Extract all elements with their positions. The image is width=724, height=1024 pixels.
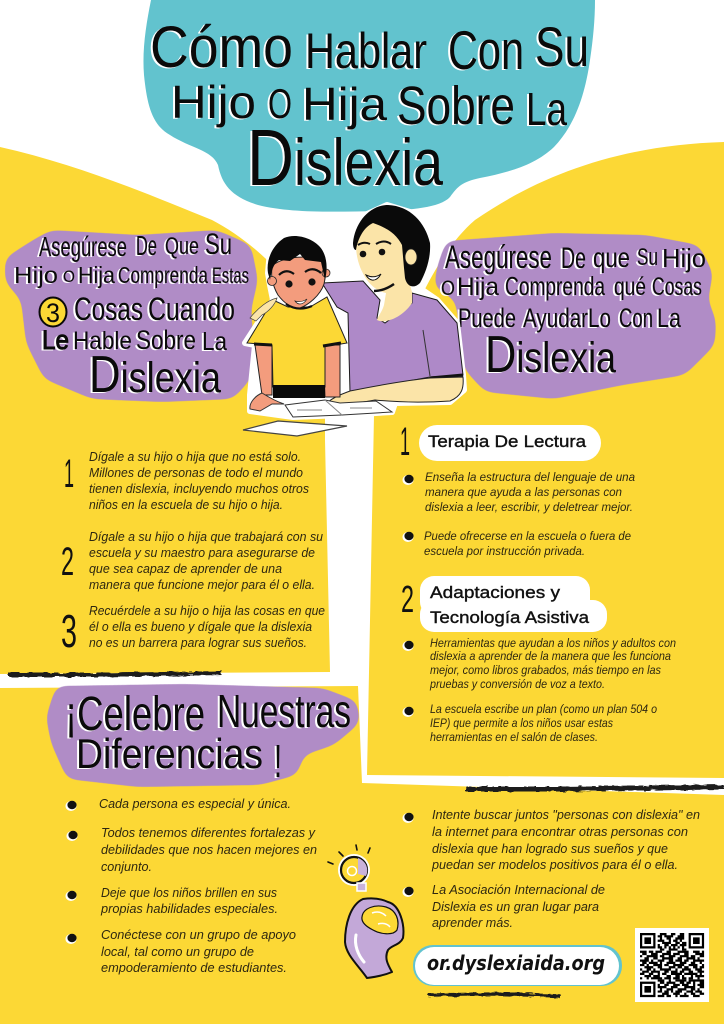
boy: arms (255, 345, 272, 395)
panel: right purple heading: Cosas (652, 273, 702, 301)
bullet text (424, 530, 632, 558)
bullet text: Cada persona es especial y única. (99, 796, 291, 811)
bullet text: escuela por instrucción privada. (424, 545, 585, 558)
panel: left purple heading: Que (165, 233, 199, 260)
panel: right purple heading: Hija (457, 273, 499, 301)
bullet text (425, 471, 636, 514)
mother: eyes (358, 242, 391, 257)
bullet text (100, 885, 278, 916)
bullet text: empoderamiento de estudiantes. (101, 960, 287, 975)
link pill: or.dyslexiaida.org (427, 951, 605, 975)
bullet text: Deje que los niños brillen en sus (101, 885, 277, 900)
icon: lightbulb (328, 845, 370, 891)
title: O (268, 80, 292, 127)
brush stroke right (466, 787, 724, 789)
pill heading: accommodations: Adaptaciones y (430, 583, 561, 602)
panel: left purple heading: Cuando (148, 291, 235, 327)
panel: right purple heading: De (561, 242, 586, 275)
panel: celebrate heading: ! (274, 735, 282, 787)
bullet text: Dislexia es un gran lugar para (432, 899, 599, 914)
bullet text (429, 637, 676, 691)
number 3 circle (40, 298, 66, 328)
title: La (526, 83, 567, 135)
bullet (402, 532, 414, 542)
list: supports (400, 420, 676, 744)
panel: right purple heading: que (593, 242, 630, 273)
number 3: 3 (61, 605, 77, 657)
bullet text: La escuela escribe un plan (como un plan 504 o (430, 703, 658, 716)
title: Cómo (150, 15, 293, 80)
title: Hablar (305, 23, 427, 79)
list: celebrate (66, 796, 317, 975)
panel: right purple heading: Hijo (662, 243, 706, 273)
list: resources (402, 807, 700, 930)
number 2: 2 (61, 540, 74, 584)
item 3 text: no es un barrera para lograr sus sueños. (89, 635, 307, 650)
bullet text: manera que ayuda a las personas con (425, 486, 622, 499)
bullet text: dislexia a leer, escribir, y deletrear mejor. (425, 501, 633, 514)
panel: left purple heading: Sobre (136, 325, 196, 355)
item 3 text: él o ella es bueno y dígale que la dislexia (89, 619, 312, 634)
title: Hijo (171, 76, 256, 128)
brush stroke under link (428, 994, 560, 996)
panel: right purple heading: Dislexia (485, 326, 616, 384)
boy: mouth (295, 299, 307, 304)
boy: hair (268, 236, 327, 280)
decorative band behind figure (240, 330, 470, 415)
list: three things: 1 (64, 452, 74, 496)
item 2 text: Dígale a su hijo o hija que trabajará con su (89, 529, 323, 544)
panel: yellow background right (367, 142, 724, 778)
panel: right purple heading: La (657, 303, 682, 333)
bullet text (101, 927, 296, 975)
panel: left purple heading: O (63, 267, 75, 286)
panel: left purple heading: La (202, 326, 227, 356)
bullet (66, 891, 77, 901)
item 1 text (89, 449, 309, 512)
mother: hair (353, 205, 430, 286)
panel: left purple heading: Cosas (74, 291, 143, 327)
link pill (413, 945, 622, 986)
bullet text: propias habilidades especiales. (100, 901, 278, 916)
item 1 text: tienen dislexia, incluyendo muchos otros (89, 481, 309, 496)
bullet text: mejor, como libros grabados, más tiempo en las (430, 664, 661, 677)
panel: right purple heading: Puede (458, 303, 516, 333)
mother: ear (405, 249, 417, 265)
title: Dislexia (247, 113, 443, 202)
panel: left purple heading: Hija (78, 262, 115, 288)
panel: right purple heading: Comprenda (505, 271, 605, 301)
list: supports: 1 (400, 420, 410, 464)
boy: head (272, 257, 325, 308)
item 2 text: que sea capaz de aprender de una (89, 561, 282, 576)
bullet (402, 475, 414, 485)
panel: left purple heading (5, 228, 258, 404)
item 3 text: Recuérdele a su hijo o hija las cosas en que (89, 603, 325, 618)
boy: sleeve bands (254, 343, 341, 346)
mother: arm (328, 377, 463, 403)
illustration: mother and son reading (243, 205, 464, 436)
boy: waistband (273, 385, 325, 398)
panel: yellow background left (0, 147, 330, 674)
bullet text: dislexia a aprender de la manera que les funciona (430, 650, 672, 663)
mother: neck and face (356, 222, 412, 321)
open book (285, 400, 392, 417)
bullet text: Enseña la estructura del lenguaje de una (425, 471, 636, 484)
number 3 circle: 3 (46, 298, 60, 328)
title: Hija (302, 78, 387, 130)
bullet (66, 934, 77, 944)
panel: right purple heading: O (441, 277, 455, 300)
bullet text: conjunto. (101, 859, 152, 874)
bullet text: Conéctese con un grupo de apoyo (101, 927, 296, 942)
title background shape (143, 0, 595, 212)
item 2 text: manera que funcione mejor para él o ella. (89, 577, 315, 592)
bullet text: aprender más. (432, 915, 513, 930)
panel: left purple heading: Hijo (14, 262, 58, 288)
boy: shirt (247, 297, 347, 387)
bullet text: herramientas en el salón de clases. (430, 731, 598, 744)
bullet text: Intente buscar juntos "personas con dislexia" en (432, 807, 700, 822)
item 1 text: niños en la escuela de su hijo o hija. (89, 497, 283, 512)
mother: mouth (366, 274, 381, 280)
bullet text: local, tal como un grupo de (101, 944, 254, 959)
bullet text: Herramientas que ayudan a los niños y adultos con (430, 637, 676, 650)
title (150, 15, 589, 202)
boy: eyes (279, 269, 321, 288)
mother: shirt (322, 281, 463, 392)
panel: left purple heading: Su (205, 228, 232, 261)
title: Su (535, 15, 589, 78)
bullet text: IEP) que permite a los niños usar estas (430, 717, 613, 730)
panel: left purple heading: Dislexia (89, 346, 221, 404)
bullet (402, 887, 414, 897)
panel: right purple heading: Asegúrese (445, 239, 552, 275)
item 2 text (89, 529, 323, 592)
bullet (66, 801, 77, 811)
panel: celebrate heading: Nuestras (217, 685, 351, 737)
number 2: 2 (401, 579, 414, 621)
bullet text: Todos tenemos diferentes fortalezas y (101, 825, 316, 840)
title: Con (448, 19, 524, 81)
pill heading: accommodations: Tecnología Asistiva (430, 608, 590, 627)
panel: yellow background bottom (0, 686, 724, 1024)
panel: celebrate heading (46, 684, 360, 787)
title: Sobre (397, 76, 515, 136)
pill heading: accommodations (420, 576, 607, 632)
white halo (245, 205, 464, 417)
boy: hand (250, 393, 284, 411)
QR code (635, 928, 709, 1002)
panel: right purple heading: Con (619, 303, 653, 333)
item 2 text: escuela y su maestro para asegurarse de (89, 545, 315, 560)
mother: hand on shoulder (250, 298, 277, 321)
panel: left purple heading: De (136, 230, 157, 261)
bullet text (430, 703, 658, 744)
bullet text (432, 882, 605, 930)
item 3 text (89, 603, 325, 650)
mother: sleeve band (430, 375, 463, 378)
icon: head with brain (345, 898, 403, 978)
bullet text: Puede ofrecerse en la escuela o fuera de (424, 530, 632, 543)
bullet text: pruebas y conversión de voz a texto. (429, 678, 605, 691)
bullet text: la internet para encontrar otras personas con (432, 824, 688, 839)
panel: right purple heading (434, 233, 716, 399)
bullet text: dislexia que han logrado sus sueños y que (432, 841, 668, 856)
bullet text: puedan ser modelos positivos para él o ella. (431, 857, 678, 872)
bullet (402, 707, 414, 717)
white gutter (326, 416, 373, 442)
pill heading: reading therapy: Terapia De Lectura (428, 432, 587, 451)
bullet (402, 813, 414, 823)
panel: right purple heading: Su (637, 244, 658, 271)
loose paper (243, 421, 347, 436)
list: three things (61, 449, 325, 657)
panel: celebrate heading: Diferencias (76, 730, 263, 777)
bullet text: La Asociación Internacional de (432, 882, 605, 897)
panel: right purple heading: qué (614, 273, 646, 301)
item 1 text: Dígale a su hijo o hija que no está solo. (89, 449, 301, 464)
panel: right purple heading: AyudarLo (523, 303, 611, 333)
bullet text (431, 807, 700, 872)
panel: left purple heading: Asegúrese (39, 231, 127, 262)
item 1 text: Millones de personas de todo el mundo (89, 465, 303, 480)
bullet (66, 831, 78, 841)
panel: left purple heading: Le (42, 325, 69, 355)
panel: left purple heading: Comprenda (118, 262, 208, 288)
panel: left purple heading: Estas (212, 263, 249, 288)
pill heading: reading therapy (419, 425, 601, 461)
bullet text: debilidades que nos hacen mejores en (101, 842, 317, 857)
bullet (402, 641, 414, 651)
panel: celebrate heading: ¡Celebre (65, 688, 205, 741)
bullet text (101, 825, 317, 874)
panel: left purple heading: Hable (73, 327, 132, 355)
brain (362, 906, 398, 934)
brush stroke left (8, 673, 222, 675)
